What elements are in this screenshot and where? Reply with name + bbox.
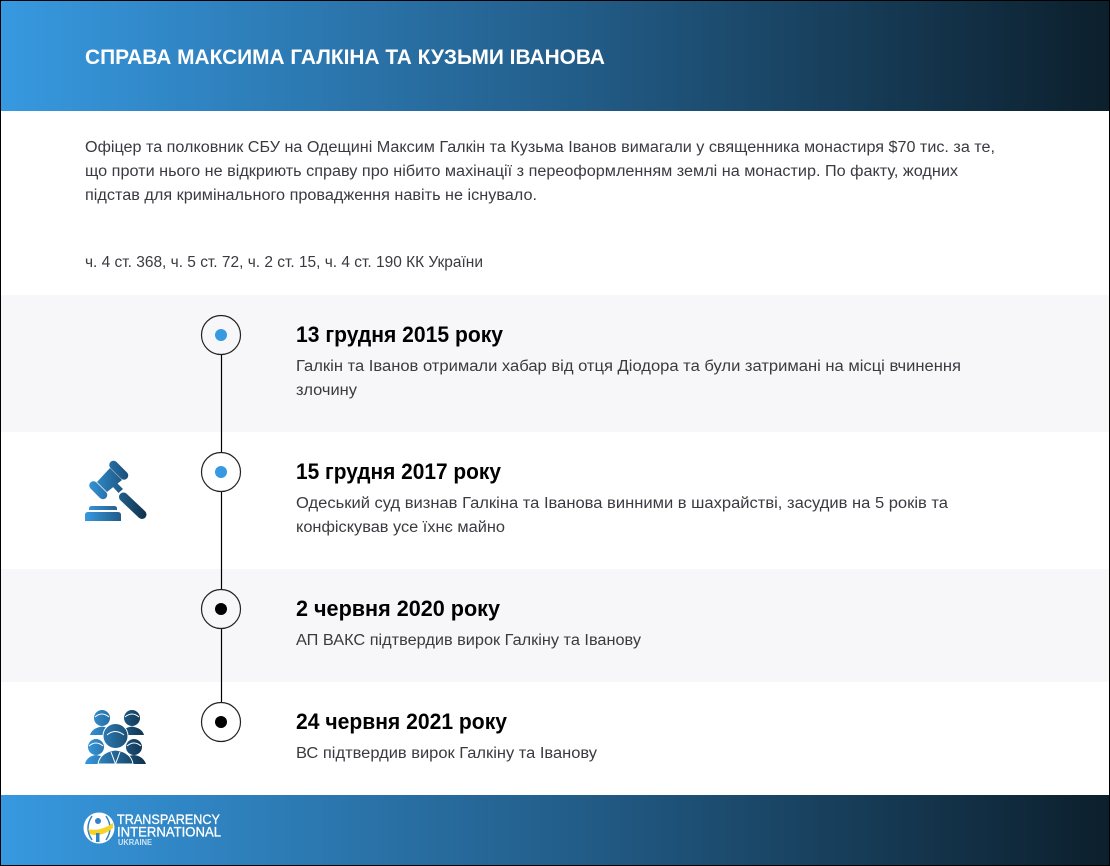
timeline event 4: 24 червня 2021 року [296, 709, 508, 734]
timeline marker 2 [202, 452, 240, 492]
header band [0, 0, 1110, 111]
title: СПРАВА МАКСИМА ГАЛКІНА ТА КУЗЬМИ ІВАНОВА [85, 45, 605, 69]
timeline event 3 [296, 596, 641, 649]
timeline event 2: конфіскував усе їхнє майно [296, 519, 505, 536]
timeline row backgrounds [0, 295, 1110, 682]
timeline event 2: 15 грудня 2017 року [296, 459, 502, 484]
timeline marker 3 [202, 590, 240, 628]
legal articles: ч. 4 ст. 368, ч. 5 ст. 72, ч. 2 ст. 15, ч. 4 ст. 190 КК України [85, 254, 483, 271]
logo: Transparency International Ukraine: TRANSPARENCY [117, 812, 220, 827]
timeline marker 4 [202, 702, 240, 742]
timeline event 2: Одеський суд визнав Галкіна та Іванова винними в шахрайстві, засудив на 5 років та [296, 495, 948, 512]
timeline event 3: 2 червня 2020 року [296, 596, 501, 621]
timeline event 4: ВС підтвердив вирок Галкіну та Іванову [296, 745, 597, 762]
logo: Transparency International Ukraine: INTERNATIONAL [117, 824, 221, 840]
case summary text: Офіцер та полковник СБУ на Одещині Максим Галкін та Кузьма Іванов вимагали у священника монастиря $70 тис. за те, [85, 139, 995, 156]
icon: gavel [85, 465, 142, 521]
case summary text [85, 139, 995, 204]
logo: Transparency International Ukraine: UKRAINE [118, 838, 153, 847]
case summary text: підстав для кримінального провадження навіть не існувало. [85, 187, 537, 204]
timeline line [220, 335, 222, 722]
logo: Transparency International Ukraine [84, 812, 221, 847]
timeline event 4 [296, 709, 597, 762]
icon: group of people [85, 710, 146, 764]
timeline marker 1 [202, 316, 240, 354]
case summary text: що проти нього не відкриють справу про нібито махінації з переоформленням землі на монастир. По факту, жодних [85, 163, 958, 180]
timeline event 1: 13 грудня 2015 року [296, 322, 504, 347]
timeline event 2 [296, 459, 948, 536]
timeline event 1: Галкін та Іванов отримали хабар від отця Діодора та були затримані на місці вчинення [296, 358, 961, 375]
timeline event 3: АП ВАКС підтвердив вирок Галкіну та Іванову [296, 632, 641, 649]
timeline event 1: злочину [296, 382, 357, 399]
footer band [0, 795, 1110, 866]
timeline event 1 [296, 322, 961, 399]
